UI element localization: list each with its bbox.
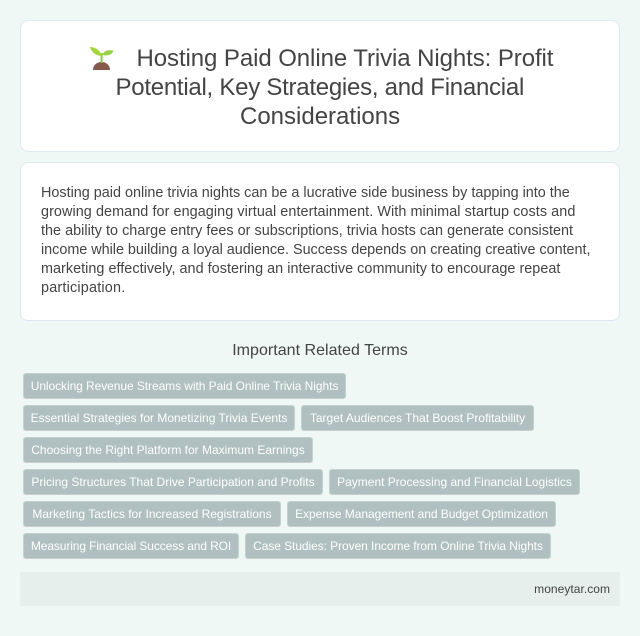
tag: Marketing Tactics for Increased Registrations [32,507,272,521]
panel: description [20,162,620,321]
title: Considerations [240,103,400,130]
tag [23,373,346,399]
title panel [20,20,620,152]
tag list [23,373,580,559]
tag: Case Studies: Proven Income from Online Trivia Nights [253,539,543,553]
tag [329,469,580,495]
description text: growing demand for engaging virtual entertainment. With minimal startup costs and [41,204,575,220]
tag [245,533,551,559]
tag [287,501,556,527]
tag [23,501,281,527]
tag: Expense Management and Budget Optimization [295,507,548,521]
tag: Unlocking Revenue Streams with Paid Online Trivia Nights [31,379,338,393]
description text [41,185,590,296]
footer text: moneytar.com [534,582,610,596]
footer bar [20,572,620,606]
description text: the ability to charge entry fees or subscriptions, trivia hosts can generate consistent [41,223,573,239]
tag [23,437,313,463]
tag: Payment Processing and Financial Logistics [337,475,572,489]
tag [23,405,295,431]
icon: sprout [90,47,114,70]
description text: participation. [41,280,125,296]
description text: Hosting paid online trivia nights can be a lucrative side business by tapping into the [41,185,570,201]
tag: Measuring Financial Success and ROI [31,539,231,553]
tag: Essential Strategies for Monetizing Trivia Events [31,411,287,425]
title: Potential, Key Strategies, and Financial [116,74,524,101]
tag [23,533,239,559]
description text: marketing effectively, and fostering an interactive community to encourage repeat [41,261,560,277]
tag: Target Audiences That Boost Profitability [310,411,525,425]
heading: related terms: Important Related Terms [232,342,408,359]
title [116,45,554,130]
tag [301,405,534,431]
tag: Choosing the Right Platform for Maximum Earnings [31,443,305,457]
title: Hosting Paid Online Trivia Nights: Profit [136,45,553,72]
tag [23,469,323,495]
description text: income while building a loyal audience. Success depends on creating creative content, [41,242,590,258]
tag: Pricing Structures That Drive Participation and Profits [31,475,315,489]
